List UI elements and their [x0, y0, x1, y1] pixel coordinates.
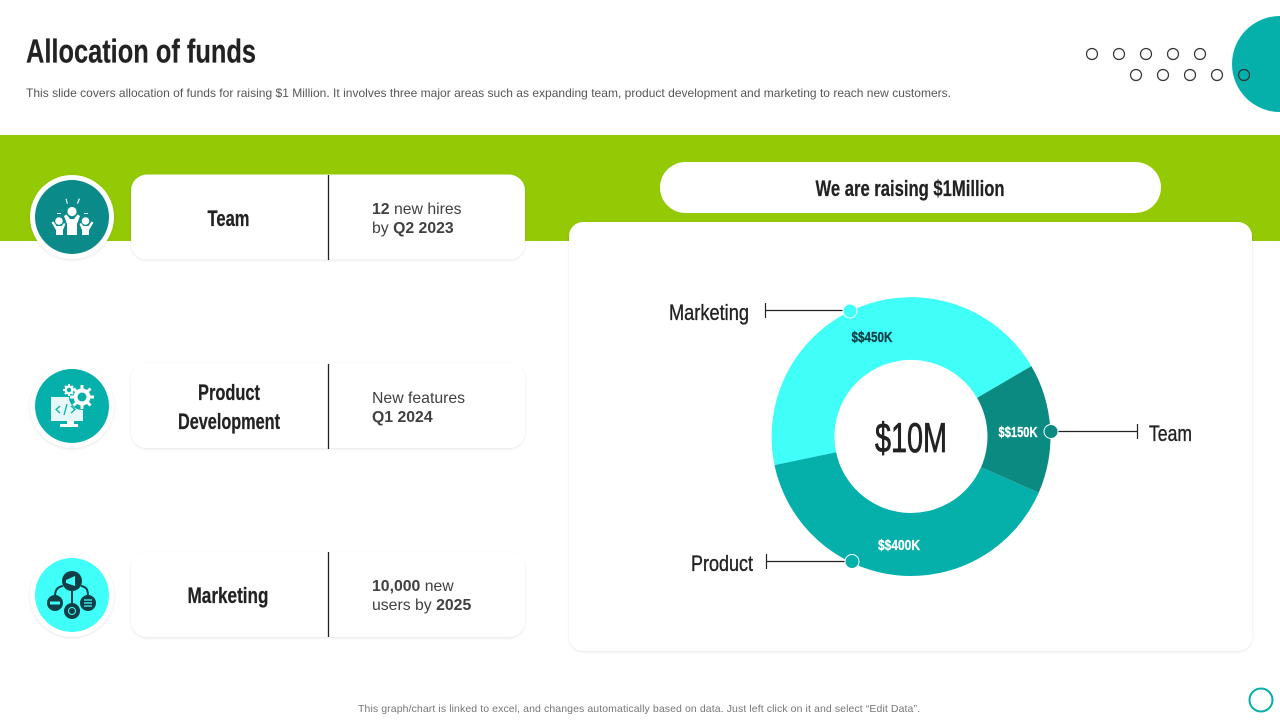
callout: Product — [691, 551, 859, 576]
card: Team — [131, 174, 525, 260]
card detail: Team: 12 new hires — [372, 201, 462, 218]
card: Marketing — [131, 552, 525, 637]
card detail: Marketing: users by 2025 — [372, 597, 471, 614]
page marker circle — [1250, 688, 1272, 712]
segment: Product — [774, 452, 1039, 576]
card detail: Marketing: 10,000 new — [372, 578, 454, 595]
value: Marketing: $$450K — [852, 329, 893, 346]
card detail: Product Development: Q1 2024 — [372, 409, 433, 426]
row: Team — [30, 174, 525, 260]
card heading: Product Development: Product — [198, 380, 260, 405]
subtitle text: This slide covers allocation of funds for raising $1 Million. It involves three major areas such as expanding team, product development and marketing to reach new customers. — [26, 86, 951, 100]
card detail: Product Development: New features — [372, 390, 465, 407]
value: Product: $$400K — [878, 537, 920, 554]
callout: Product: Product — [691, 551, 753, 576]
callout: Team: Team — [1149, 421, 1192, 446]
icon: marketing — [30, 553, 114, 637]
card: Product Development — [131, 363, 525, 449]
value: Team: $$150K — [998, 424, 1038, 441]
icon: team — [30, 175, 114, 259]
raising pill — [660, 162, 1161, 213]
donut chart — [772, 297, 1050, 576]
callout: Marketing: Marketing — [669, 300, 749, 325]
title: Allocation of funds — [26, 32, 256, 70]
card heading: Marketing: Marketing — [188, 583, 268, 608]
panel: donut chart — [569, 222, 1252, 651]
segment: Team — [977, 366, 1050, 493]
green band — [0, 135, 1280, 241]
callout: Marketing — [669, 300, 857, 325]
segment: Marketing — [772, 297, 1031, 465]
footer note: This graph/chart is linked to excel, and changes automatically based on data. Just left click on it and select “Edit Data”. — [358, 703, 920, 715]
decoration: teal circle and dots — [1086, 16, 1280, 112]
card heading: Product Development: Development — [178, 409, 280, 434]
row: Product Development — [30, 363, 525, 449]
card heading: Team: Team — [208, 206, 250, 231]
card detail: Team: by Q2 2023 — [372, 220, 454, 237]
row: Marketing — [30, 552, 525, 637]
icon: product development — [30, 364, 114, 448]
callout: Team — [1044, 421, 1192, 446]
center value: $10M — [875, 414, 947, 461]
pill heading: We are raising $1Million — [816, 176, 1004, 201]
